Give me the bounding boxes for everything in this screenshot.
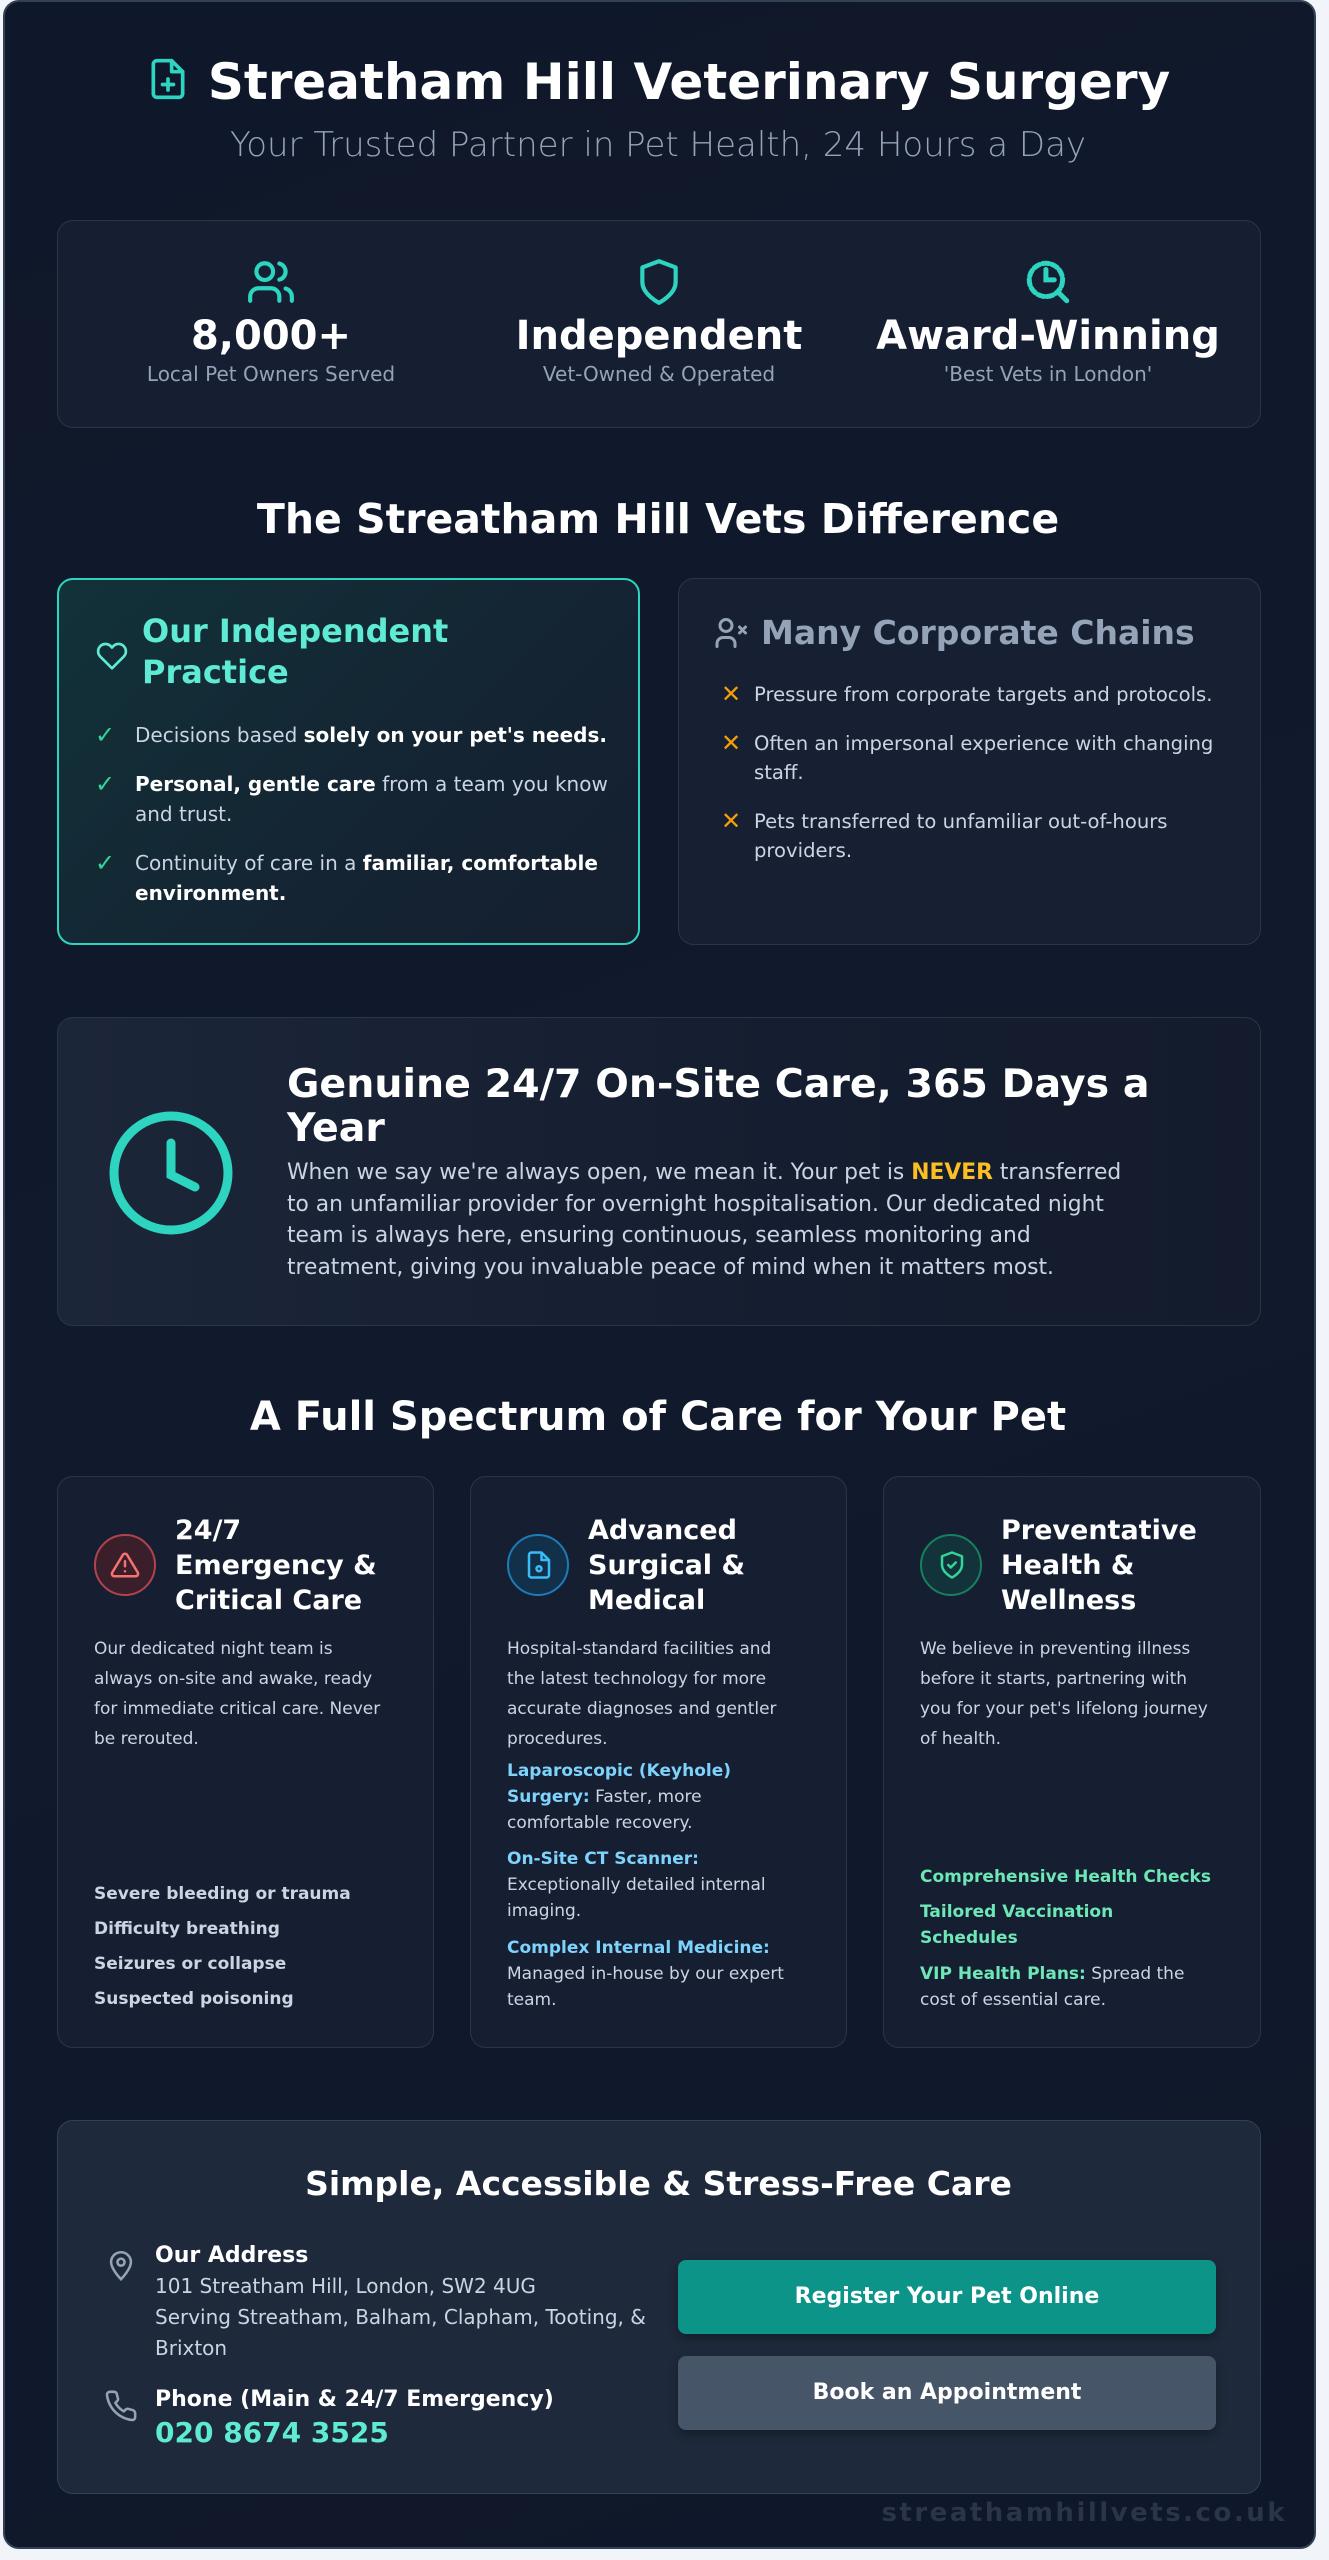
title: Emergency & — [175, 1550, 377, 1581]
title — [588, 1515, 745, 1616]
heading: our independent practice: Practice — [142, 653, 289, 691]
list: emergencies: Seizures or collapse — [94, 1954, 286, 1974]
title — [1001, 1515, 1197, 1616]
stat: independent — [516, 259, 802, 386]
icon: warning — [94, 1534, 156, 1596]
icon: medical file — [152, 58, 184, 100]
text: phone — [155, 2387, 554, 2449]
panel: stats — [57, 220, 1261, 428]
text: 24/7 description: treatment, giving you invaluable peace of mind when it matters most. — [287, 1254, 1054, 1280]
list: benefits: ✓ — [95, 770, 115, 798]
title: Preventative — [1001, 1515, 1197, 1546]
list: services: Managed in-house by our expert — [507, 1964, 784, 1984]
heading: 24/7 care: Genuine 24/7 On-Site Care, 365 Days a — [287, 1061, 1150, 1107]
list: services: Complex Internal Medicine: — [507, 1938, 770, 1958]
text: 24/7 description — [287, 1160, 1121, 1280]
heading: contact: Simple, Accessible & Stress-Free Care — [305, 2164, 1012, 2203]
list: wellness: VIP Health Plans: Spread the — [920, 1964, 1184, 1984]
heading: many corporate chains: Many Corporate Chains — [761, 613, 1195, 652]
stat: pet owners: Local Pet Owners Served — [147, 362, 395, 386]
list: emergencies: Severe bleeding or trauma — [94, 1884, 351, 1904]
text: Our dedicated night team is — [94, 1639, 333, 1659]
icon: phone — [106, 2390, 136, 2422]
icon: users — [248, 261, 294, 303]
heading: our independent practice — [142, 612, 448, 691]
list: services: team. — [507, 1990, 557, 2010]
list: services: On-Site CT Scanner: — [507, 1849, 699, 1869]
title: 24/7 — [175, 1515, 241, 1546]
list: wellness — [920, 1867, 1211, 2010]
stat: award: 'Best Vets in London' — [944, 362, 1152, 386]
list: benefits: Decisions based solely on your pet's needs. — [135, 723, 607, 747]
text: accurate diagnoses and gentler — [507, 1699, 777, 1719]
list: drawbacks: Pressure from corporate targets and protocols. — [754, 683, 1212, 706]
text: for immediate critical care. Never — [94, 1699, 380, 1719]
list: drawbacks: ✕ — [721, 680, 741, 708]
icon: shield — [640, 259, 678, 305]
list: emergencies: Difficulty breathing — [94, 1919, 280, 1939]
button: register: Register Your Pet Online — [795, 2284, 1099, 2309]
stat: award — [876, 260, 1220, 386]
title: Streatham Hill Veterinary Surgery — [208, 53, 1170, 111]
list: emergencies — [94, 1884, 351, 2009]
list: benefits: environment. — [135, 881, 286, 905]
list: emergencies: Suspected poisoning — [94, 1989, 294, 2009]
panel: independent practice — [57, 578, 640, 945]
title: Wellness — [1001, 1585, 1136, 1616]
title: Critical Care — [175, 1585, 362, 1616]
title: Medical — [588, 1585, 705, 1616]
list: benefits: Personal, gentle care from a team you know — [135, 772, 608, 796]
button: book: Book an Appointment — [813, 2380, 1081, 2405]
list: benefits: ✓ — [95, 849, 115, 877]
title: Surgical & — [588, 1550, 745, 1581]
text: 24/7 description: to an unfamiliar provider for overnight hospitalisation. Our dedicated night — [287, 1192, 1104, 1216]
heading: 24/7 care: Year — [287, 1105, 385, 1151]
button: register — [678, 2260, 1216, 2334]
panel: corporate chains — [678, 578, 1261, 945]
stat: independent: Independent — [516, 313, 802, 359]
text: address: Brixton — [155, 2336, 227, 2360]
icon: map pin — [110, 2251, 132, 2281]
icon: heart — [96, 642, 128, 670]
panel: 24/7 care — [57, 1017, 1261, 1326]
text: of health. — [920, 1729, 1001, 1749]
list: wellness: cost of essential care. — [920, 1990, 1106, 2010]
footer: website: streathamhillvets.co.uk — [881, 2498, 1287, 2528]
card: surgical — [470, 1476, 847, 2048]
icon: shield check — [920, 1534, 982, 1596]
list: wellness: Schedules — [920, 1928, 1018, 1948]
text: you for your pet's lifelong journey — [920, 1699, 1208, 1719]
list: wellness: Comprehensive Health Checks — [920, 1867, 1211, 1887]
list: drawbacks: ✕ — [721, 729, 741, 757]
card: preventative — [883, 1476, 1261, 2048]
text: procedures. — [507, 1729, 608, 1749]
panel: contact — [57, 2120, 1261, 2494]
text: 24/7 description: team is always here, ensuring continuous, seamless monitoring and — [287, 1223, 1031, 1248]
list: drawbacks: providers. — [754, 839, 852, 862]
list: benefits: ✓ — [95, 721, 115, 749]
text: be rerouted. — [94, 1729, 199, 1749]
list: services: Exceptionally detailed internal — [507, 1875, 766, 1895]
list: drawbacks — [721, 680, 1213, 862]
list: drawbacks: Often an impersonal experience with changing — [754, 732, 1213, 755]
list: services: Surgery: Faster, more — [507, 1787, 702, 1807]
text: phone: Phone (Main & 24/7 Emergency) — [155, 2387, 554, 2412]
list: benefits: Continuity of care in a familiar, comfortable — [135, 851, 598, 875]
text: address: Serving Streatham, Balham, Clapham, Tooting, & — [155, 2305, 646, 2329]
subtitle: Your Trusted Partner in Pet Health, 24 Hours a Day — [230, 125, 1086, 165]
heading: our independent practice: Our Independent — [142, 612, 448, 650]
list: drawbacks: ✕ — [721, 807, 741, 835]
list: drawbacks: staff. — [754, 761, 804, 784]
icon: user x — [716, 618, 747, 648]
text — [507, 1639, 777, 1749]
text: always on-site and awake, ready — [94, 1669, 372, 1689]
list: services — [507, 1761, 784, 2010]
list: services: imaging. — [507, 1901, 581, 1921]
list: services: Laparoscopic (Keyhole) — [507, 1761, 731, 1781]
icon: award clock — [1026, 260, 1070, 304]
title — [175, 1515, 377, 1616]
heading: difference: The Streatham Hill Vets Difference — [257, 495, 1059, 543]
stat: independent: Vet-Owned & Operated — [543, 362, 775, 386]
title: Health & — [1001, 1550, 1134, 1581]
list: wellness: Tailored Vaccination — [920, 1902, 1113, 1922]
icon: clock — [110, 1112, 232, 1234]
button: book — [678, 2356, 1216, 2430]
list: benefits: and trust. — [135, 802, 232, 826]
icon: file — [507, 1534, 569, 1596]
title: Advanced — [588, 1515, 737, 1546]
heading: 24/7 care — [286, 1061, 1150, 1151]
text: before it starts, partnering with — [920, 1669, 1187, 1689]
text: phone: 020 8674 3525 — [155, 2416, 389, 2449]
card: emergency — [57, 1476, 434, 2048]
stat: award: Award-Winning — [876, 313, 1220, 359]
list: services: comfortable recovery. — [507, 1813, 693, 1833]
text — [94, 1639, 380, 1749]
text: address — [155, 2243, 646, 2360]
text: address: Our Address — [155, 2243, 308, 2268]
heading: full spectrum: A Full Spectrum of Care for Your Pet — [250, 1394, 1066, 1440]
text — [920, 1639, 1208, 1749]
text: the latest technology for more — [507, 1669, 766, 1689]
stat: pet owners: 8,000+ — [191, 313, 351, 359]
list: benefits — [95, 721, 608, 905]
list: drawbacks: Pets transferred to unfamiliar out-of-hours — [754, 810, 1168, 833]
text: We believe in preventing illness — [920, 1639, 1190, 1659]
text: 24/7 description: When we say we're always open, we mean it. Your pet is NEVER transferred — [287, 1160, 1121, 1185]
text: address: 101 Streatham Hill, London, SW2 4UG — [155, 2274, 536, 2298]
text: Hospital-standard facilities and — [507, 1639, 771, 1659]
stat: pet owners — [147, 261, 395, 386]
